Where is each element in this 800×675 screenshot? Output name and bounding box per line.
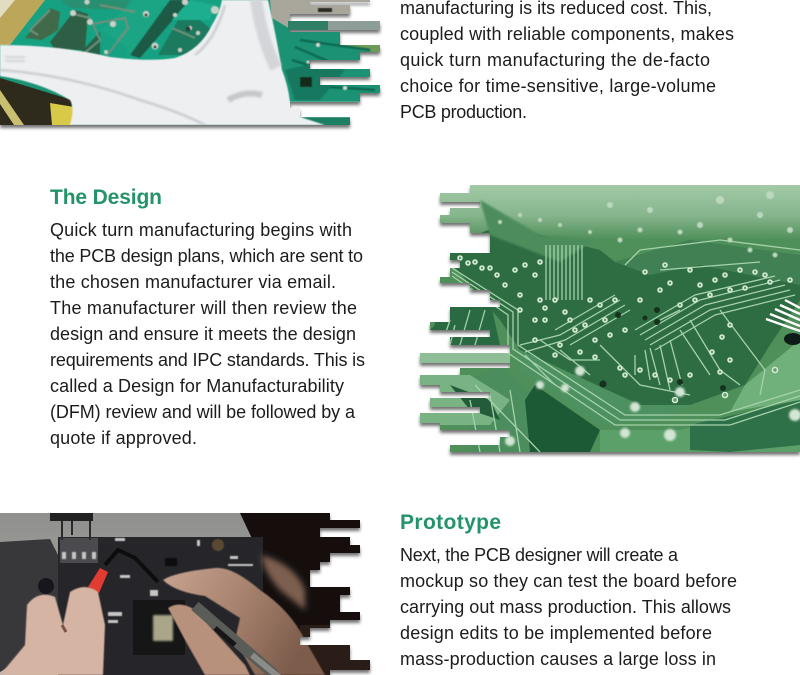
paragraph: prototype process: mass-production causes a large loss in — [400, 649, 716, 669]
paragraph: design process: (DFM) review and will be followed by a — [50, 402, 356, 422]
paragraph: prototype process: Next, the PCB designer will create a — [400, 545, 679, 565]
paragraph: prototype process: mockup so they can test the board before — [400, 571, 737, 591]
paragraph: cost benefit: coupled with reliable components, makes — [400, 24, 734, 44]
paragraph: cost benefit: choice for time-sensitive, large-volume — [400, 76, 716, 96]
paragraph: cost benefit — [400, 0, 734, 122]
paragraph: design process: quote if approved. — [50, 428, 197, 448]
paragraph: cost benefit: PCB production. — [400, 102, 527, 122]
image: gloved hand holding circuit board — [0, 0, 380, 125]
heading: The Design: The Design — [50, 186, 162, 209]
paragraph: design process: the PCB design plans, which are sent to — [50, 246, 363, 266]
paragraph: design process — [50, 220, 365, 448]
paragraph: prototype process: design edits to be implemented before — [400, 623, 712, 643]
paragraph: design process: design and ensure it meets the design — [50, 324, 356, 344]
image: hands testing board with probes — [0, 513, 380, 675]
paragraph: design process: The manufacturer will then review the — [50, 298, 357, 318]
image: green circuit board close-up — [410, 185, 800, 452]
paragraph: design process: called a Design for Manufacturability — [50, 376, 344, 396]
heading: Prototype: Prototype — [400, 511, 501, 534]
paragraph: prototype process: carrying out mass production. This allows — [400, 597, 731, 617]
paragraph: design process: requirements and IPC standards. This is — [50, 350, 365, 370]
paragraph: prototype process — [400, 545, 737, 669]
paragraph: cost benefit: quick turn manufacturing the de-facto — [400, 50, 710, 70]
paragraph: design process: the chosen manufacturer via email. — [50, 272, 336, 292]
paragraph: design process: Quick turn manufacturing begins with — [50, 220, 352, 240]
